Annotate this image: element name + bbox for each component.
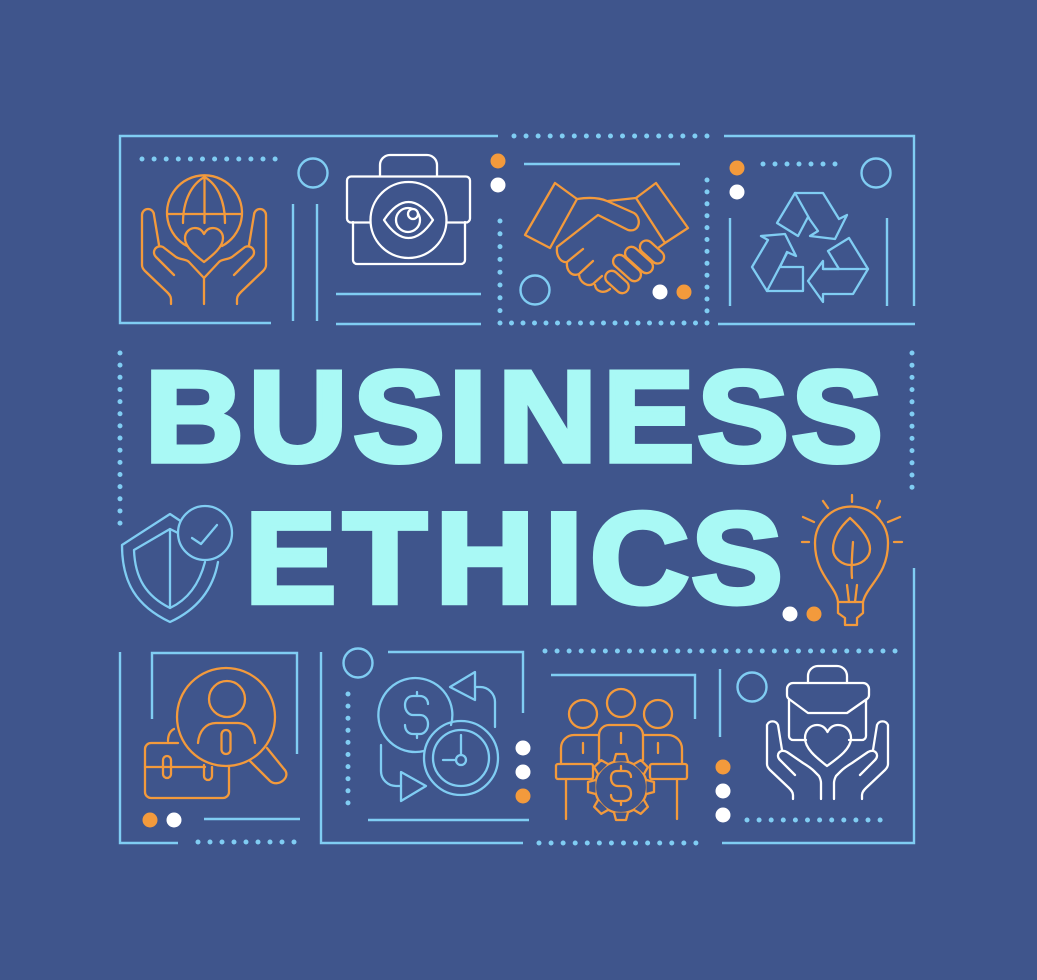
- title: business ethics: [145, 346, 883, 631]
- icon: dollar coin and clock exchange: [378, 672, 498, 801]
- icon: briefcase with eye lens: [347, 155, 470, 264]
- icon: magnifier over person and briefcase: [145, 668, 286, 798]
- icon: handshake: [525, 183, 688, 296]
- title: business ethics: BUSINESS: [145, 346, 883, 489]
- icon: shield with check: [122, 506, 232, 622]
- panel: bottom frame and decorations: [120, 568, 914, 843]
- title: business ethics: ETHICS: [245, 487, 783, 631]
- icon: team with dollar gear: [556, 689, 687, 820]
- icon: hands holding briefcase with heart: [767, 666, 888, 799]
- icon: recycle arrows: [752, 193, 868, 302]
- icon: light bulb with leaf: [802, 495, 902, 625]
- icon: hands holding globe with heart: [142, 175, 266, 304]
- panel: top frame and decorations: [120, 136, 915, 324]
- panel: side dotted columns: [120, 353, 912, 524]
